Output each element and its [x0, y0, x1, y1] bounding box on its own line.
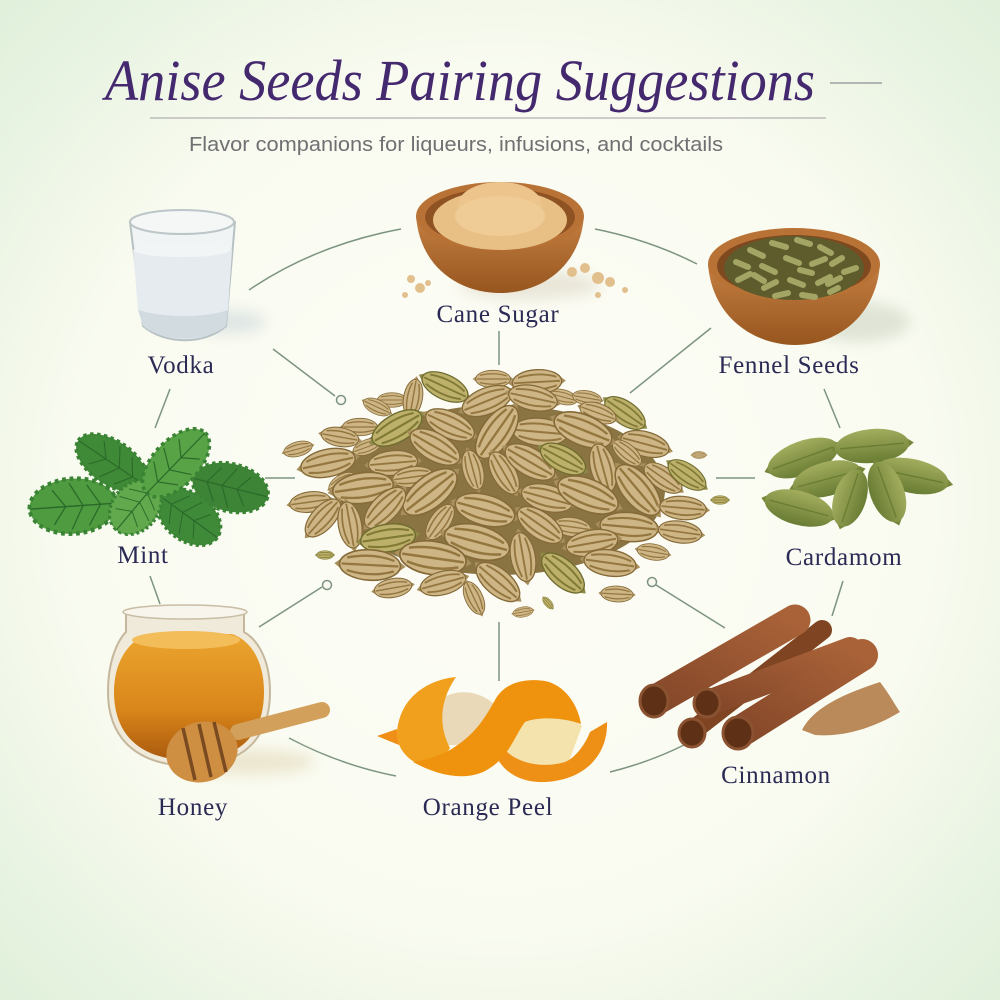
central anise seed pile [280, 364, 730, 620]
title: Anise Seeds Pairing Suggestions [101, 48, 815, 113]
icon: cane sugar bowl [402, 182, 628, 299]
icon: honey jar [108, 605, 322, 790]
label: Honey: Honey [158, 794, 228, 821]
icon: fennel seeds bowl [708, 228, 910, 345]
label: Fennel Seeds: Fennel Seeds [718, 352, 860, 379]
icon: vodka glass [130, 210, 266, 340]
label: Cane Sugar: Cane Sugar [437, 301, 559, 328]
icon: orange peel [377, 677, 607, 782]
subtitle: Flavor companions for liqueurs, infusions, and cocktails [189, 134, 723, 156]
icon: cinnamon sticks [640, 620, 900, 749]
icon: mint [28, 417, 274, 557]
label: Vodka: Vodka [148, 352, 214, 379]
label: Cardamom: Cardamom [786, 544, 902, 571]
connector lines [150, 229, 843, 776]
label: Cinnamon: Cinnamon [721, 762, 831, 789]
icon: cardamom [757, 425, 957, 535]
label: Mint: Mint [117, 542, 169, 569]
label: Orange Peel: Orange Peel [423, 794, 553, 821]
